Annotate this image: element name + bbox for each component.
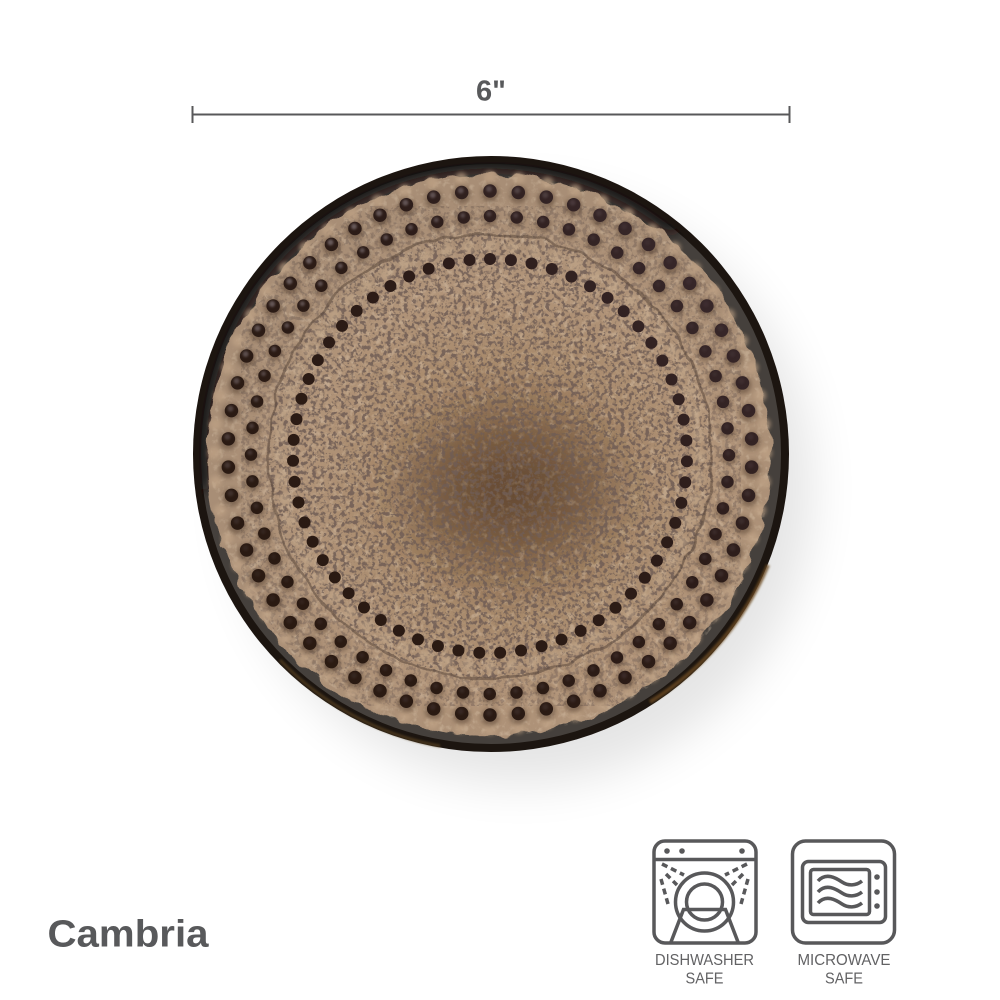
middle dot ring bbox=[251, 216, 729, 694]
plate drop shadow bbox=[232, 192, 812, 784]
dimension marker: 6 inch diameter bbox=[192, 76, 790, 123]
rim amber highlight lower left bbox=[280, 660, 440, 746]
grey pooled glaze under the field bbox=[201, 164, 781, 744]
glaze channel between rings bbox=[268, 234, 712, 678]
plate: reactive-glaze Cambria dish bbox=[193, 156, 789, 752]
control buttons bbox=[664, 848, 745, 854]
control panel line bbox=[654, 858, 756, 861]
dishwasher body bbox=[654, 841, 756, 943]
icon: microwave safe bbox=[792, 841, 894, 943]
microwave buttons bbox=[874, 874, 880, 909]
water spray right bbox=[725, 864, 748, 904]
plate outer circle bbox=[676, 873, 734, 931]
middle dot halo bbox=[251, 218, 729, 696]
glaze field bbox=[193, 156, 781, 744]
label: dishwasher safe bbox=[655, 952, 754, 988]
glazed surface with irregular edge bbox=[208, 174, 770, 736]
title: product name: Cambria bbox=[48, 914, 209, 956]
rim amber highlight bbox=[650, 565, 768, 702]
outer frame bbox=[792, 841, 894, 943]
label: microwave safe: SAFE bbox=[825, 970, 863, 988]
microwave window bbox=[810, 870, 870, 914]
microwave waves bbox=[818, 876, 862, 907]
outer band speckle bbox=[241, 206, 741, 706]
label: microwave safe: MICROWAVE bbox=[798, 952, 890, 969]
inner dot ring bbox=[293, 259, 687, 653]
microwave body bbox=[802, 862, 886, 922]
outer dot highlights bbox=[227, 189, 751, 713]
raised scallops around outer dots bbox=[214, 177, 766, 729]
outer dot halo bbox=[228, 193, 752, 717]
middle dot highlights bbox=[250, 214, 728, 692]
mottled light tone bbox=[211, 176, 771, 736]
dimension label: 6" bbox=[476, 76, 506, 108]
plate inner circle bbox=[686, 884, 722, 920]
dark speckle texture bbox=[269, 234, 713, 678]
rack bbox=[671, 910, 738, 942]
raised scallops around inner dots bbox=[280, 246, 700, 666]
label: microwave safe bbox=[798, 952, 890, 988]
outer dot ring bbox=[228, 191, 752, 715]
centre shadow pooling bbox=[405, 425, 615, 555]
dimension line bbox=[192, 106, 790, 123]
plate rim bbox=[193, 156, 789, 752]
label: dishwasher safe: DISHWASHER bbox=[655, 952, 754, 969]
label: dishwasher safe: SAFE bbox=[686, 970, 724, 988]
water spray left bbox=[661, 864, 684, 904]
icon: dishwasher safe bbox=[654, 841, 756, 943]
dark top-left pooled glaze bbox=[193, 156, 680, 490]
